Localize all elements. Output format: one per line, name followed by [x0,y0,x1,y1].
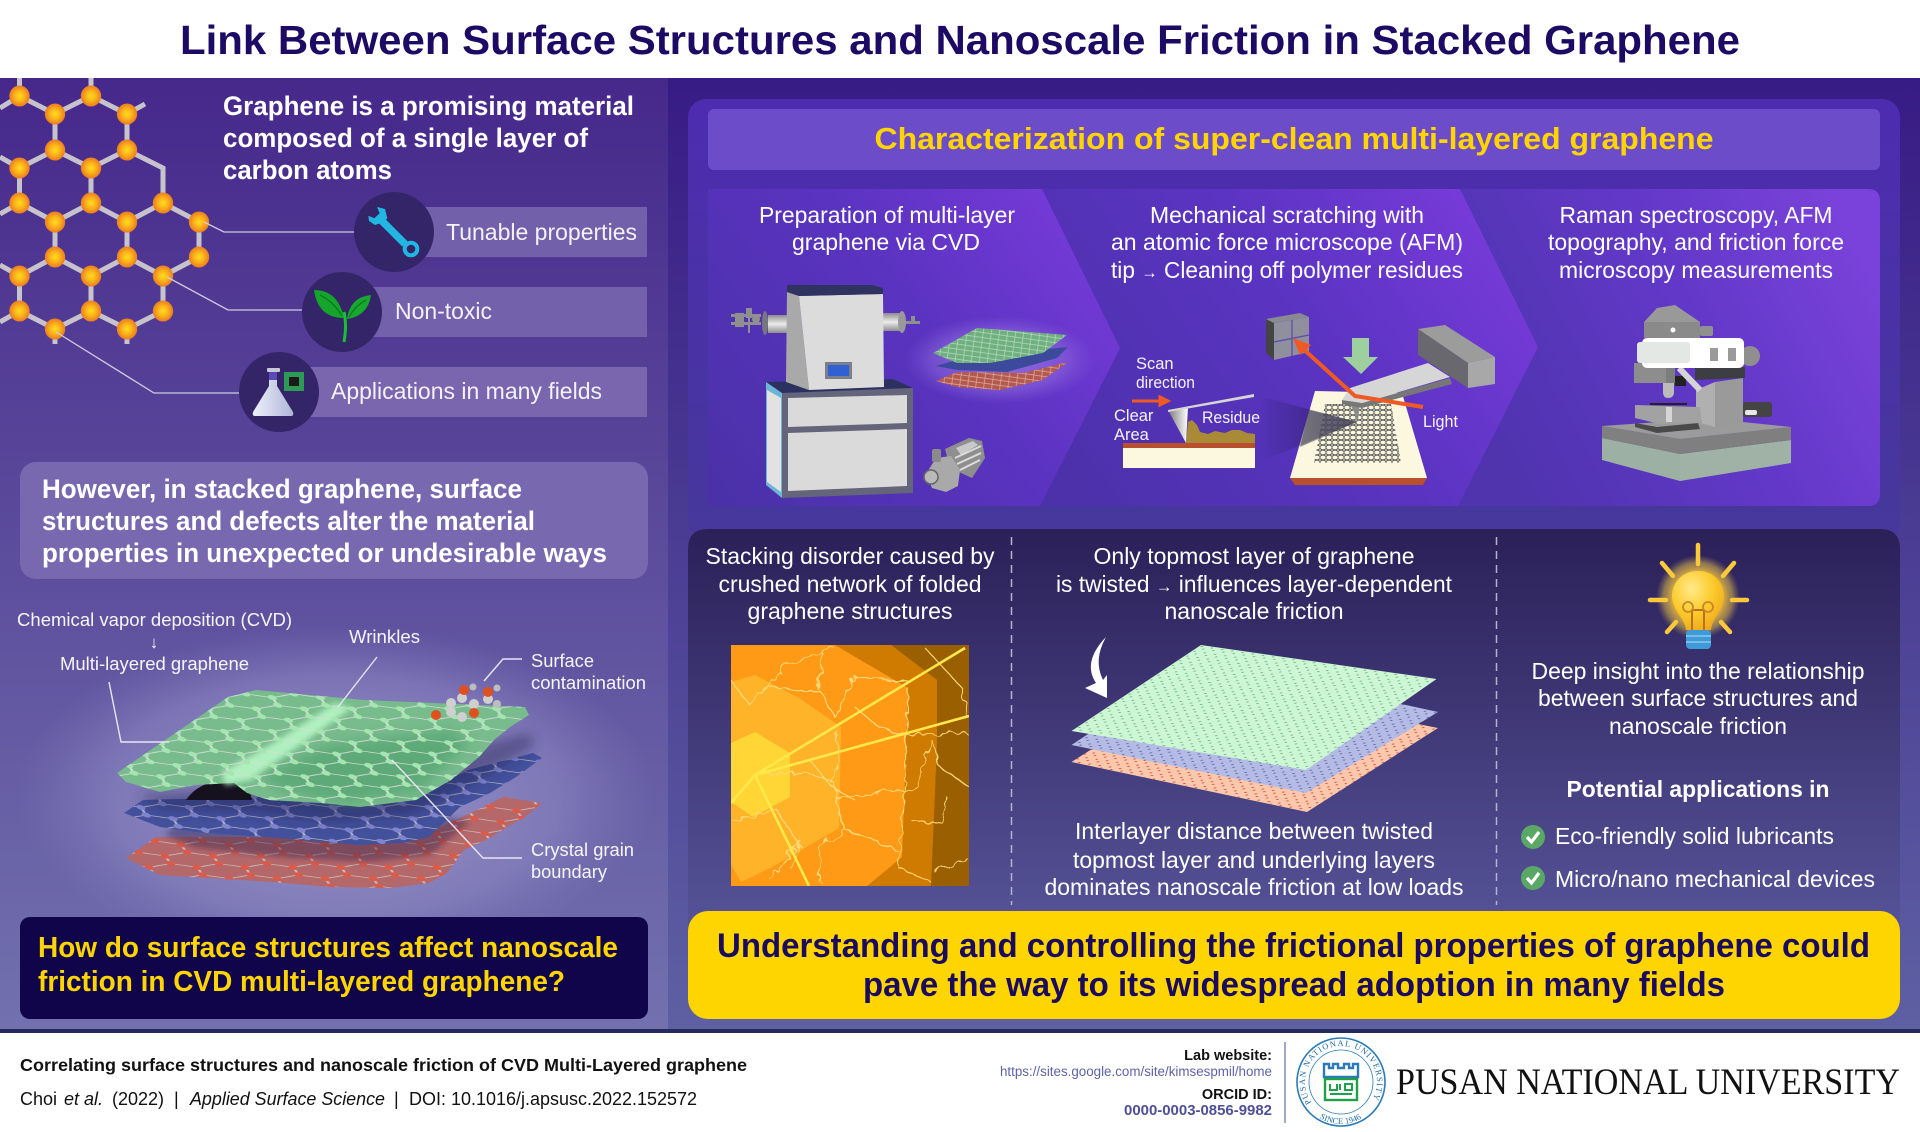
logo: university seal: SINCE 1946 [1320,1114,1361,1124]
stack labels: contamination [531,672,646,693]
icon: light bulb [1650,545,1747,649]
illustration: AFM scratching inset [1123,394,1255,468]
AFM labels: Clear [1114,407,1154,425]
callout: however box: However, in stacked graphene, surface [42,474,522,504]
footer divider stripe [0,1029,1920,1033]
citation: Correlating surface structures and nanoscale friction of CVD Multi-Layered graphene [20,1055,747,1075]
section heading [708,109,1880,170]
step 2 text [1111,202,1463,283]
property: applications [239,352,647,432]
property: non-toxic: Non-toxic [395,298,492,324]
arrow: laser light path [1293,338,1423,407]
citation: | [174,1089,179,1109]
question box: friction in CVD multi-layered graphene? [38,966,565,998]
step 3 chevron panel [1458,189,1880,506]
twisted layer text: Only topmost layer of graphene [1094,543,1414,569]
logo: university seal: PUSAN NATIONAL UNIVERSITY [1299,1040,1383,1106]
panel: left background [0,78,668,1029]
lab contact details: https://sites.google.com/site/kimsespmil/home [1000,1064,1272,1079]
citation: DOI: 10.1016/j.apsusc.2022.152572 [409,1089,697,1109]
insight text: between surface structures and [1538,685,1858,711]
graphene lattice illustration [0,78,354,393]
layer: blue graphene [124,753,542,845]
stack labels: ↓ [150,633,158,652]
lab contact details: 0000-0003-0856-9982 [1124,1102,1272,1119]
application: lubricants: Eco-friendly solid lubricants [1555,823,1834,849]
application: devices: Micro/nano mechanical devices [1555,866,1875,892]
icon: flask and chip [253,368,304,416]
gas valves [731,308,761,333]
conclusion banner: pave the way to its widespread adoption in many fields [863,966,1725,1004]
stacking disorder text: Stacking disorder caused by [706,543,995,569]
step 3 text: Raman spectroscopy, AFM [1560,202,1832,228]
conclusion banner [688,911,1900,1019]
property: tunable properties [354,192,647,272]
interlayer text: dominates nanoscale friction at low loads [1044,874,1464,900]
step 1 text [759,202,1015,255]
callout: however box: structures and defects alter the material [42,506,535,536]
stack labels: Multi-layered graphene [60,653,249,674]
callout: however box [20,462,648,579]
AFM labels: Residue [1202,409,1260,427]
intro text: Graphene is a promising material [223,91,634,121]
panel: results card [688,529,1900,930]
arrow: scan direction [1132,397,1168,405]
dark gap under fold [186,780,252,800]
arrow: applied force [1343,338,1378,374]
layer shadow [165,815,470,862]
panel: characterization card [688,99,1900,539]
property: non-toxic [302,272,647,352]
layer shadow [135,733,535,822]
AFM labels: Scan [1136,355,1174,373]
illustration: AFM instrument [1257,313,1495,485]
interlayer text [1044,818,1464,900]
illustration: vacuum pump [924,438,985,492]
title: Link Between Surface Structures and Nanoscale Friction in Stacked Graphene [180,17,1740,63]
lab contact details [1000,1048,1272,1119]
AFM labels: Area [1114,426,1150,444]
property: applications: Applications in many fields [331,378,602,404]
insight text: nanoscale friction [1609,713,1787,739]
illustration: CVD furnace [731,285,920,498]
arrow: twist direction [1085,637,1107,698]
potential applications heading: Potential applications in [1566,776,1830,802]
illustration: multilayer graphene stack [15,625,655,965]
step 2 text: an atomic force microscope (AFM) [1111,229,1463,255]
AFM labels: Light [1423,413,1458,431]
question box [20,917,648,1019]
citation: Choi [20,1089,57,1109]
stack labels: boundary [531,861,608,882]
layer: red graphene [126,797,542,888]
callout: however box: properties in unexpected or undesirable ways [42,538,607,568]
stack labels: Chemical vapor deposition (CVD) [17,609,292,630]
stack labels: Wrinkles [349,626,420,647]
intro text: composed of a single layer of [223,123,588,153]
stack labels: Surface [531,650,594,671]
citation [20,1055,747,1109]
icon: wrench [368,207,417,255]
AFM labels: direction [1136,374,1195,392]
stack labels [17,609,646,882]
illustration: mini graphene stack [904,316,1096,404]
lab contact details: ORCID ID: [1202,1087,1272,1103]
step 3 text [1548,202,1844,283]
stack labels: Crystal grain [531,839,634,860]
layer: green graphene [117,690,529,807]
step 2 chevron panel [1040,189,1538,506]
stacking disorder text [706,543,995,624]
property: tunable properties: Tunable properties [446,219,637,245]
illustration: microscope [1602,305,1791,481]
icon: sprout [314,290,371,342]
step 2 text: tip → Cleaning off polymer residues [1111,257,1463,283]
stacking disorder text: crushed network of folded [718,571,982,597]
conclusion banner: Understanding and controlling the frictional properties of graphene could [717,927,1870,965]
step 1 text: Preparation of multi-layer [759,202,1015,228]
insight text [1532,658,1864,739]
AFM labels [1114,355,1458,444]
lab contact details: Lab website: [1184,1048,1272,1064]
footer separator [1284,1042,1286,1123]
question box: How do surface structures affect nanoscale [38,932,618,964]
citation: et al. [64,1089,103,1109]
illustration: twisted graphene layers [1072,645,1438,812]
microscopy image: folded graphene [731,645,969,886]
twisted layer text [1056,543,1453,624]
stacking disorder text: graphene structures [748,598,952,624]
twisted layer text: nanoscale friction [1164,598,1344,624]
twisted layer text: is twisted → influences layer-dependent [1056,571,1453,597]
step 2 text: Mechanical scratching with [1150,202,1424,228]
citation: | [394,1089,399,1109]
intro text: carbon atoms [223,155,392,185]
citation: Applied Surface Science [189,1089,385,1109]
section heading: Characterization of super-clean multi-layered graphene [874,121,1714,156]
step 3 text: topography, and friction force [1548,229,1844,255]
citation: (2022) [112,1089,164,1109]
interlayer text: topmost layer and underlying layers [1073,847,1435,873]
surface contamination molecules [431,684,501,722]
step 3 text: microscopy measurements [1559,257,1833,283]
step 1 text: graphene via CVD [792,229,980,255]
panel: right background [668,78,1920,1029]
step 1 chevron panel [708,189,1120,506]
interlayer text: Interlayer distance between twisted [1075,818,1433,844]
intro text [223,91,634,185]
stack callout lines [109,657,522,858]
divider lines [1012,537,1496,905]
insight text: Deep insight into the relationship [1532,658,1864,684]
